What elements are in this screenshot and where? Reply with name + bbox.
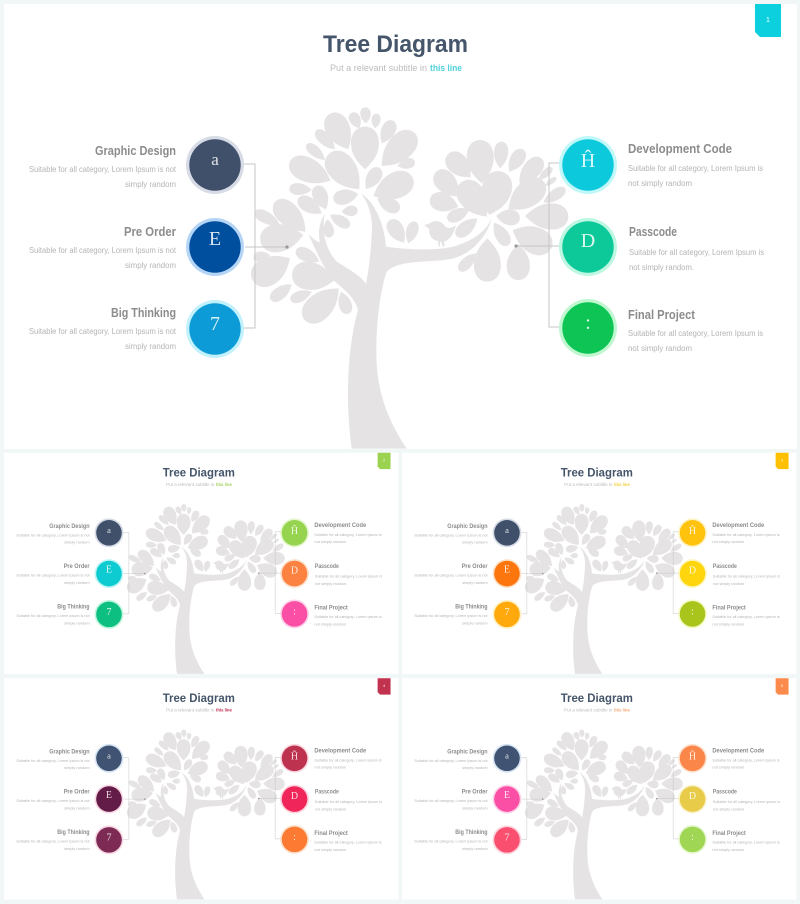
item: Development Code [559,136,763,194]
item: Pre Order: Suitable for all category, Lorem Ipsum is not [414,798,488,803]
item: Big Thinking: Suitable for all category, Lorem Ipsum is not [29,327,177,336]
item: Final Project: not simply random [314,621,347,626]
item: Graphic Design: Graphic Design [447,523,488,530]
item: Passcode: Passcode [315,563,339,570]
connector lines [123,757,281,839]
page tab: 1 [766,17,770,24]
connector lines [243,163,561,328]
item: Pre Order: E [209,228,221,250]
item: Graphic Design: simply random [64,540,90,545]
item: Graphic Design: Suitable for all category, Lorem Ipsum is not [29,165,177,174]
item: Final Project: Final Project [314,830,348,837]
item: Development Code: Suitable for all category, Lorem Ipsum is [314,757,382,762]
item: Pre Order [16,785,123,814]
item: Final Project [280,825,382,854]
item: Graphic Design: a [107,525,111,535]
item: Big Thinking: simply random [462,620,488,625]
item: Development Code: Suitable for all category, Lorem Ipsum is [712,757,780,762]
title: Tree Diagram [561,466,633,480]
subtitle: this line [614,482,630,487]
item: Passcode [678,785,780,814]
item: Pre Order: simply random [64,806,90,811]
item: Passcode: Suitable for all category, Lorem Ipsum is [713,574,780,579]
title: Tree Diagram [561,691,633,705]
panel: main slide 1 [4,4,797,449]
connector lines [521,532,679,614]
title: Tree Diagram [163,466,235,480]
item: Final Project: not simply random [628,344,692,353]
item: Final Project [678,825,780,854]
item: Development Code [280,518,382,547]
item: Development Code: Ĥ [291,525,298,537]
item: Passcode: not simply random. [629,263,694,272]
item: Pre Order: simply random [462,580,488,585]
title: Tree Diagram [163,691,235,705]
item: Passcode: Suitable for all category, Lorem Ipsum is [629,248,764,257]
panel: thumbnail slide 3 [402,453,797,674]
tree illustration [522,504,683,674]
item: Development Code: Ĥ [581,149,595,172]
item: Development Code [280,744,382,773]
item: Graphic Design: Graphic Design [95,144,176,158]
item: Pre Order: Pre Order [64,789,90,796]
item: Passcode: Passcode [713,789,737,796]
item: Pre Order [414,785,521,814]
item: Big Thinking: Big Thinking [111,306,176,320]
item: Passcode: not simply random. [713,807,745,812]
item: Pre Order: Pre Order [124,225,176,239]
panel: thumbnail slide 4 [4,678,399,900]
item: Development Code: not simply random [628,179,692,188]
item: Development Code: not simply random [712,765,745,770]
item: Final Project: : [293,606,296,617]
panel: thumbnail slide 5 [402,678,797,900]
item: Final Project [678,599,780,628]
item: Graphic Design [29,136,244,194]
item: Passcode: Passcode [315,789,339,796]
item: Final Project: not simply random [314,847,347,852]
item: Big Thinking [414,825,521,854]
item: Passcode: Passcode [713,563,737,570]
page tab: 2 [383,459,385,463]
subtitle: this line [216,482,232,487]
item: Passcode: Suitable for all category, Lorem Ipsum is [713,799,780,804]
item: Big Thinking: Big Thinking [57,829,90,836]
item: Passcode: not simply random. [315,581,347,586]
item: Graphic Design: a [211,150,219,169]
page tab: 5 [781,684,783,688]
item: Final Project: Suitable for all category, Lorem Ipsum is [628,329,763,338]
item: Big Thinking: 7 [106,832,111,843]
item: Final Project: : [691,832,694,843]
item: Pre Order [16,559,123,588]
subtitle: this line [614,708,630,713]
connector lines [521,757,679,839]
item: Final Project: : [293,832,296,843]
item: Development Code: Ĥ [291,750,298,762]
item: Development Code [678,518,780,547]
item: Final Project [280,599,382,628]
item: Development Code: Development Code [712,522,765,529]
tree illustration [124,504,285,674]
item: Development Code: Development Code [712,747,765,754]
page tab [755,4,781,37]
item: Graphic Design: a [107,750,111,760]
item: Big Thinking: simply random [64,620,90,625]
item: Pre Order: Pre Order [64,563,90,570]
item: Development Code: not simply random [712,539,745,544]
item: Big Thinking: 7 [106,607,111,618]
item: Final Project: Suitable for all category, Lorem Ipsum is [712,614,780,619]
item: Development Code: not simply random [314,539,347,544]
item: Big Thinking: simply random [462,846,488,851]
title: Tree Diagram [323,31,468,58]
item: Final Project: : [585,312,591,334]
item: Graphic Design: a [505,750,509,760]
subtitle: Put a relevant subtitle in [330,63,427,73]
item: Development Code: Ĥ [689,750,696,762]
item: Graphic Design: Graphic Design [447,748,488,755]
item: Graphic Design [414,744,521,773]
connector lines [123,532,281,614]
item: Final Project: : [691,606,694,617]
item: Big Thinking [414,600,521,629]
item: Graphic Design: Graphic Design [49,748,90,755]
item: Final Project: not simply random [712,847,745,852]
item: Pre Order: Pre Order [462,789,488,796]
item: Big Thinking: Suitable for all category, Lorem Ipsum is not [16,613,90,618]
item: Passcode [678,559,780,588]
page tab [776,453,789,469]
item: Big Thinking: Suitable for all category, Lorem Ipsum is not [414,613,488,618]
item: Development Code: not simply random [314,765,347,770]
item: Pre Order: Pre Order [462,563,488,570]
item: Passcode: D [689,566,696,577]
item: Graphic Design: Suitable for all category, Lorem Ipsum is not [414,532,488,537]
item: Graphic Design: simply random [462,540,488,545]
item: Development Code [678,744,780,773]
item: Graphic Design [16,744,123,773]
subtitle: Put a relevant subtitle in [166,708,215,713]
panel: thumbnail slide 2 [4,453,399,674]
item: Big Thinking: 7 [210,313,220,335]
item: Passcode: Passcode [629,225,677,239]
item: Big Thinking [16,600,123,629]
item: Development Code: Development Code [314,522,367,529]
item: Final Project: Suitable for all category, Lorem Ipsum is [314,614,382,619]
item: Big Thinking [29,300,244,358]
item: Graphic Design: simply random [64,765,90,770]
item: Pre Order: simply random [64,580,90,585]
item: Big Thinking: 7 [504,832,509,843]
subtitle: Put a relevant subtitle in [564,708,613,713]
item: Development Code: Development Code [628,142,732,156]
item: Passcode: D [689,791,696,802]
item: Final Project: Suitable for all category, Lorem Ipsum is [712,839,780,844]
item: Development Code: Suitable for all category, Lorem Ipsum is [712,532,780,537]
item: Graphic Design: Suitable for all category, Lorem Ipsum is not [414,758,488,763]
item: Graphic Design: Suitable for all category, Lorem Ipsum is not [16,532,90,537]
item: Pre Order: E [504,565,510,576]
item: Passcode: Suitable for all category, Lorem Ipsum is [315,799,382,804]
item: Final Project [559,299,763,357]
tree illustration [522,729,683,899]
item: Pre Order: E [106,790,112,801]
page tab [776,678,789,695]
tree illustration [246,107,569,449]
item: Big Thinking: Big Thinking [57,603,90,610]
item: Pre Order: simply random [462,806,488,811]
item: Big Thinking: Suitable for all category, Lorem Ipsum is not [414,838,488,843]
item: Passcode [559,218,764,276]
item: Final Project: Suitable for all category, Lorem Ipsum is [314,839,382,844]
subtitle: this line [216,708,232,713]
item: Development Code: Ĥ [689,525,696,537]
item: Pre Order: E [504,790,510,801]
item: Pre Order: simply random [125,261,176,270]
item: Passcode: Suitable for all category, Lorem Ipsum is [315,574,382,579]
item: Passcode: not simply random. [713,581,745,586]
item: Development Code: Suitable for all category, Lorem Ipsum is [628,164,763,173]
item: Passcode: D [581,230,595,252]
item: Final Project: Final Project [628,308,696,322]
item: Pre Order: E [106,565,112,576]
tree illustration [124,729,285,899]
subtitle: Put a relevant subtitle in [564,482,613,487]
item: Pre Order [29,218,244,276]
item: Passcode [280,559,382,588]
item: Final Project: Final Project [712,604,746,611]
item: Graphic Design: Graphic Design [49,523,90,530]
item: Big Thinking: simply random [64,846,90,851]
item: Big Thinking: Suitable for all category, Lorem Ipsum is not [16,838,90,843]
item: Passcode: D [291,791,298,802]
item: Graphic Design: Suitable for all category, Lorem Ipsum is not [16,758,90,763]
item: Graphic Design [414,518,521,547]
item: Big Thinking: simply random [125,342,176,351]
item: Development Code: Suitable for all category, Lorem Ipsum is [314,532,382,537]
item: Graphic Design: simply random [462,765,488,770]
item: Final Project: not simply random [712,621,745,626]
item: Pre Order: Suitable for all category, Lorem Ipsum is not [16,573,90,578]
item: Big Thinking: Big Thinking [455,603,488,610]
item: Pre Order: Suitable for all category, Lorem Ipsum is not [16,798,90,803]
item: Passcode: not simply random. [315,807,347,812]
item: Development Code: Development Code [314,747,367,754]
page tab: 3 [781,459,783,463]
item: Big Thinking: Big Thinking [455,829,488,836]
item: Passcode: D [291,566,298,577]
item: Final Project: Final Project [314,604,348,611]
item: Pre Order: Suitable for all category, Lorem Ipsum is not [29,246,177,255]
subtitle: this line [430,63,462,73]
page tab [378,453,391,469]
page tab [378,678,391,695]
item: Passcode [280,785,382,814]
item: Big Thinking [16,825,123,854]
item: Graphic Design [16,518,123,547]
item: Graphic Design: simply random [125,180,176,189]
page tab: 4 [383,684,385,688]
item: Pre Order: Suitable for all category, Lorem Ipsum is not [414,573,488,578]
item: Graphic Design: a [505,525,509,535]
item: Pre Order [414,559,521,588]
subtitle: Put a relevant subtitle in [166,482,215,487]
item: Final Project: Final Project [712,830,746,837]
item: Big Thinking: 7 [504,607,509,618]
